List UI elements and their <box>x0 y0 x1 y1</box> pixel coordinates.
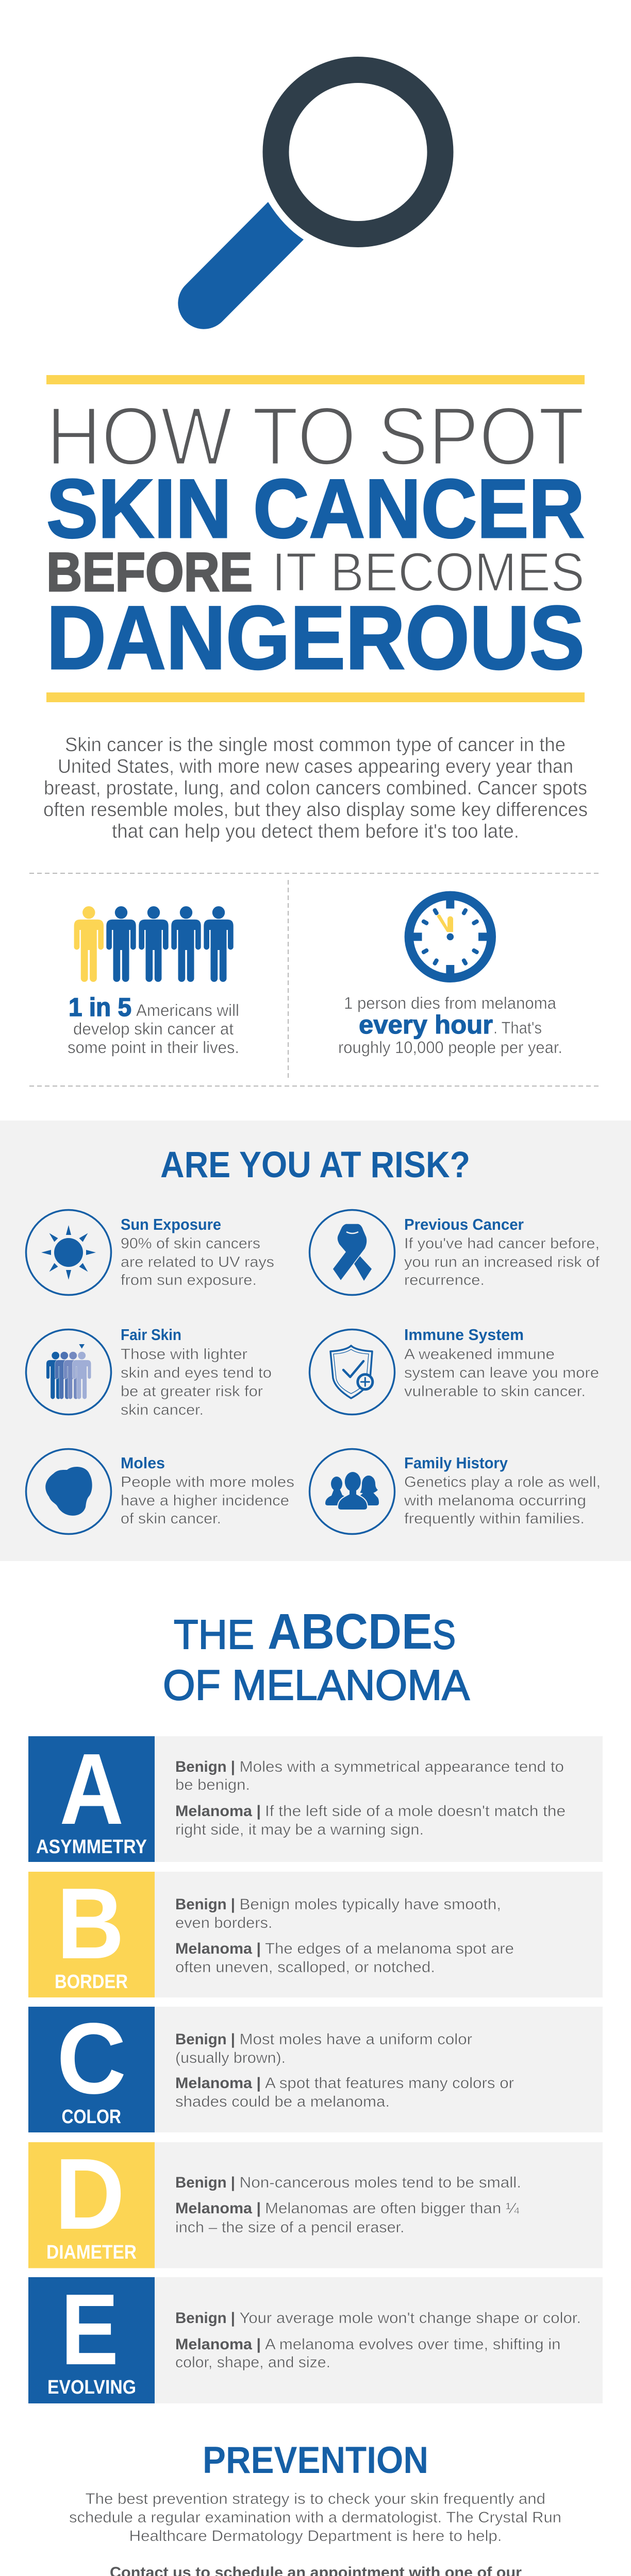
text: moles: People with more moles <box>121 1474 294 1490</box>
icon: magnifying glass <box>178 70 440 329</box>
stat text: 1 person dies from melanoma <box>344 994 556 1012</box>
text: border: The edges of a melanoma spot are <box>265 1940 514 1957</box>
stat text <box>338 994 562 1057</box>
text: asymmetry: Melanoma | <box>175 1803 261 1820</box>
text: asymmetry: If the left side of a mole doesn't match the <box>265 1803 566 1820</box>
risk item: fair skin <box>26 1326 272 1418</box>
text: previous cancer: Previous Cancer <box>404 1215 524 1233</box>
letter D: D <box>55 2138 125 2250</box>
text: previous cancer: you run an increased risk of <box>404 1254 600 1270</box>
text: asymmetry: Benign | <box>175 1758 235 1775</box>
text: fair skin: Fair Skin <box>121 1326 181 1344</box>
text: fair skin <box>121 1326 272 1418</box>
title <box>46 390 585 688</box>
prevention text <box>69 2490 561 2545</box>
text: evolving: Melanoma | <box>175 2336 261 2353</box>
risk item: immune system <box>309 1326 599 1415</box>
text: evolving: color, shape, and size. <box>175 2354 330 2371</box>
text: previous cancer <box>404 1215 600 1289</box>
card: E evolving <box>28 2273 603 2403</box>
icon: fair skin people <box>26 1329 111 1415</box>
text: evolving: Benign | <box>175 2310 235 2327</box>
text: fair skin: skin cancer. <box>121 1402 204 1418</box>
heading: the abcdes of melanoma: OF MELANOMA <box>163 1661 470 1709</box>
intro text: breast, prostate, lung, and colon cancers combined. Cancer spots <box>44 777 587 799</box>
text: previous cancer: If you've had cancer before, <box>404 1235 600 1252</box>
icon: sun <box>26 1210 111 1295</box>
text: moles: Moles <box>121 1454 165 1472</box>
intro text <box>43 734 588 842</box>
text: color: (usually brown). <box>175 2049 286 2066</box>
letter B: B <box>57 1867 124 1980</box>
text: color: Benign | <box>175 2031 235 2048</box>
title: BEFORE <box>46 541 253 603</box>
card: B border <box>28 1867 603 1997</box>
text: evolving <box>175 2310 581 2371</box>
label: evolving: EVOLVING <box>47 2377 136 2398</box>
title: SKIN CANCER <box>46 462 585 555</box>
text: color: Most moles have a uniform color <box>239 2031 472 2048</box>
text: family history: Family History <box>404 1454 508 1472</box>
text: border: often uneven, scalloped, or notched. <box>175 1959 435 1976</box>
stat: every hour <box>338 895 562 1057</box>
text: moles: have a higher incidence <box>121 1493 289 1509</box>
prevention text: Healthcare Dermatology Department is here to help. <box>129 2528 502 2545</box>
text: diameter: Melanoma | <box>175 2200 261 2217</box>
text: asymmetry: right side, it may be a warning sign. <box>175 1821 424 1838</box>
text: sun exposure: from sun exposure. <box>121 1272 257 1289</box>
stat text: 1 in 5 <box>69 993 131 1022</box>
text: immune system: vulnerable to skin cancer. <box>404 1383 586 1400</box>
text: border: Benign moles typically have smooth, <box>239 1896 501 1913</box>
text: border <box>175 1896 514 1976</box>
title: IT BECOMES <box>272 541 585 603</box>
title: DANGEROUS <box>46 588 585 688</box>
stat text: develop skin cancer at <box>73 1020 234 1038</box>
text: border: Benign | <box>175 1896 235 1913</box>
stat text: Americans will <box>136 1001 239 1020</box>
text: fair skin: Those with lighter <box>121 1346 247 1363</box>
heading: the abcdes of melanoma: S <box>433 1612 456 1657</box>
card: A asymmetry <box>28 1733 603 1862</box>
heading: are you at risk: ARE YOU AT RISK? <box>160 1145 470 1185</box>
text: color: Melanoma | <box>175 2075 261 2092</box>
icon: family <box>309 1449 395 1534</box>
prevention text: The best prevention strategy is to check your skin frequently and <box>86 2490 545 2507</box>
text: sun exposure: 90% of skin cancers <box>121 1235 260 1252</box>
risk item: previous cancer <box>309 1210 600 1295</box>
text: diameter: Benign | <box>175 2174 235 2191</box>
text: family history: frequently within families. <box>404 1511 585 1527</box>
stat text <box>68 993 239 1057</box>
text: color: A spot that features many colors or <box>265 2075 514 2092</box>
icon: five people <box>74 906 234 982</box>
icon: shield <box>309 1329 395 1415</box>
title: HOW TO SPOT <box>46 390 585 483</box>
bottom yellow rule <box>46 692 585 702</box>
icon: mole <box>26 1449 111 1534</box>
text: border: even borders. <box>175 1914 272 1931</box>
text: diameter: Non-cancerous moles tend to be small. <box>239 2174 521 2191</box>
risk item: family history <box>309 1449 601 1534</box>
card: D diameter <box>28 2138 603 2268</box>
text: border: Melanoma | <box>175 1940 261 1957</box>
stat text: every hour <box>359 1010 493 1039</box>
text: previous cancer: recurrence. <box>404 1272 485 1289</box>
text: immune system: A weakened immune <box>404 1346 555 1363</box>
heading: the abcdes of melanoma: THE <box>174 1612 254 1657</box>
text: sun exposure <box>121 1215 274 1289</box>
intro text: that can help you detect them before it's too late. <box>112 821 519 842</box>
card: C color <box>28 2002 603 2132</box>
text: diameter: inch – the size of a pencil eraser. <box>175 2219 404 2236</box>
label: asymmetry: ASYMMETRY <box>36 1836 147 1858</box>
intro text: often resemble moles, but they also display some key differences <box>43 799 588 821</box>
text: immune system <box>404 1326 599 1400</box>
risk item: sun exposure <box>26 1210 274 1295</box>
text: diameter: Melanomas are often bigger than ¼ <box>265 2200 520 2217</box>
stat: 1 in 5 <box>68 906 239 1057</box>
intro text: United States, with more new cases appearing every year than <box>58 756 573 777</box>
text: moles: of skin cancer. <box>121 1511 221 1527</box>
icon: clock <box>409 895 491 978</box>
text: evolving: Your average mole won't change shape or color. <box>239 2310 581 2327</box>
text: family history <box>404 1454 601 1527</box>
letter A: A <box>60 1733 124 1845</box>
text: sun exposure: Sun Exposure <box>121 1215 221 1233</box>
stat text: roughly 10,000 people per year. <box>338 1038 562 1057</box>
text: asymmetry <box>175 1758 566 1838</box>
text: immune system: system can leave you more <box>404 1365 599 1381</box>
text: asymmetry: be benign. <box>175 1776 250 1793</box>
text: sun exposure: are related to UV rays <box>121 1254 274 1270</box>
risk item: moles <box>26 1449 294 1534</box>
heading: the abcdes of melanoma: ABCDE <box>268 1603 433 1659</box>
top yellow rule <box>46 375 585 384</box>
text: immune system: Immune System <box>404 1326 524 1344</box>
label: diameter: DIAMETER <box>46 2242 137 2263</box>
text: diameter <box>175 2174 521 2236</box>
text: moles <box>121 1454 294 1527</box>
label: border: BORDER <box>55 1971 128 1993</box>
text: family history: Genetics play a role as well, <box>404 1474 601 1490</box>
text: evolving: A melanoma evolves over time, shifting in <box>265 2336 561 2353</box>
heading: prevention: PREVENTION <box>203 2439 428 2481</box>
text: fair skin: be at greater risk for <box>121 1383 263 1400</box>
text: family history: with melanoma occurring <box>404 1493 586 1509</box>
text: fair skin: skin and eyes tend to <box>121 1365 272 1381</box>
icon: ribbon <box>309 1210 395 1295</box>
prevention text: schedule a regular examination with a dermatologist. The Crystal Run <box>69 2509 561 2526</box>
heading: the abcdes of melanoma <box>163 1603 470 1709</box>
letter C: C <box>57 2002 126 2115</box>
intro text: Skin cancer is the single most common type of cancer in the <box>65 734 566 756</box>
stat text: . That's <box>493 1019 542 1037</box>
stat text: some point in their lives. <box>68 1038 239 1057</box>
text: color: shades could be a melanoma. <box>175 2093 390 2110</box>
text: asymmetry: Moles with a symmetrical appearance tend to <box>239 1758 564 1775</box>
letter E: E <box>61 2273 119 2386</box>
text: color <box>175 2031 514 2110</box>
label: color: COLOR <box>62 2106 121 2128</box>
panel: are you at risk <box>0 1121 631 1561</box>
